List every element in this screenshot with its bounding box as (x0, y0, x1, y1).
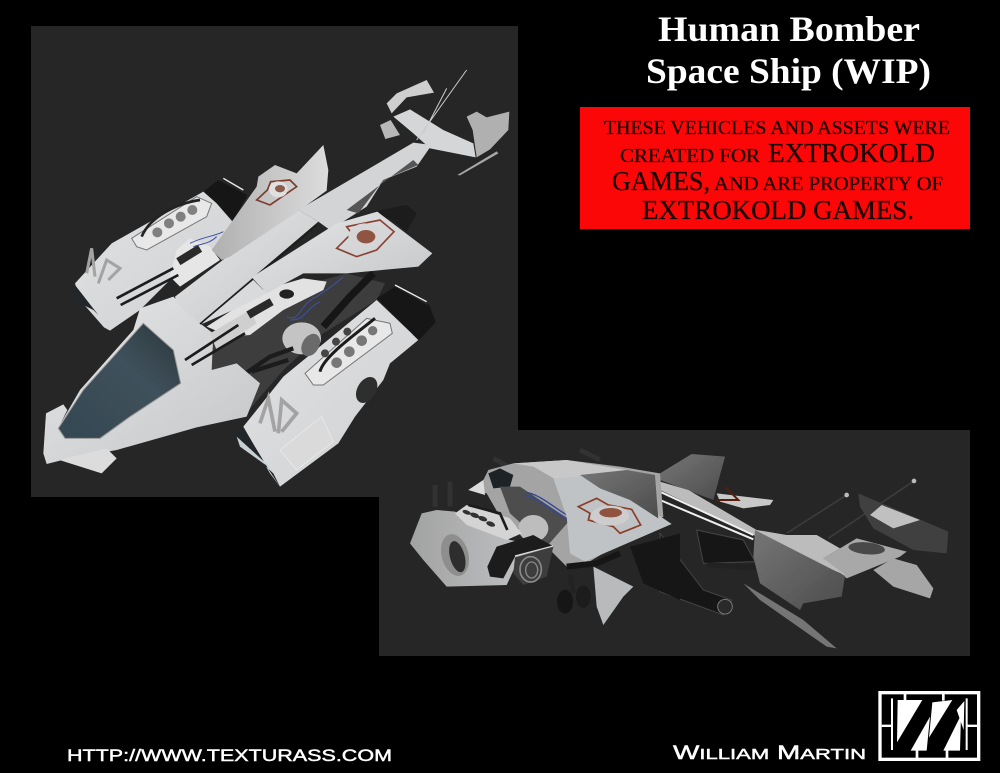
lower blade (743, 583, 837, 648)
far upright wing (660, 454, 725, 500)
author name: W ILLIAM M ARTIN (673, 743, 866, 764)
lower fin (593, 567, 633, 625)
nacelle near (660, 533, 732, 615)
antennae (787, 481, 914, 538)
emblem left wing (257, 180, 297, 205)
turbine and pipes (238, 322, 324, 378)
rear fuselage spine (298, 143, 432, 230)
engine cone tip (718, 599, 732, 614)
panel: side view render background (379, 430, 970, 656)
ship: top three-quarter view (43, 70, 509, 487)
title: Human Bomber (658, 9, 920, 49)
canopy glass (58, 323, 181, 438)
forward white hull strips and guns (117, 238, 327, 365)
nacelle front (630, 533, 680, 600)
nose fin (59, 448, 117, 473)
title (646, 9, 931, 91)
notice text (604, 117, 950, 225)
emblem (578, 498, 641, 533)
panel: top view render background (31, 26, 518, 497)
black pipe (567, 553, 620, 567)
spine shadow stripe (347, 160, 418, 213)
top hull plate (513, 460, 627, 480)
blue cables (190, 232, 343, 320)
left engine pod (73, 178, 247, 331)
right main wing (252, 212, 432, 293)
blue cables (524, 493, 570, 520)
tail assembly (380, 70, 509, 175)
website url: HTTP://WWW.TEXTURASS.COM (67, 746, 392, 765)
ship: side view, rear section (660, 454, 948, 648)
notice text: EXTROKOLD (768, 138, 935, 168)
central hull (175, 210, 318, 323)
gun barrels (435, 450, 600, 507)
top right fin (858, 493, 948, 553)
logo (880, 693, 979, 759)
turbine ring (518, 515, 548, 542)
connecting rod (707, 565, 755, 567)
hull back (468, 460, 663, 567)
spine (660, 482, 847, 576)
upper left wing (212, 145, 328, 260)
tail plank (823, 538, 907, 578)
title: Space Ship (WIP) (646, 51, 931, 91)
rear engine cluster (373, 205, 417, 232)
notice text: THESE VEHICLES AND ASSETS WERE (604, 117, 950, 139)
hull side (500, 487, 570, 547)
notice text: CREATED FOR (620, 145, 761, 167)
far wing plate (717, 487, 773, 508)
ship: side view, forward section (410, 450, 680, 625)
dark lower fuselage (203, 273, 385, 417)
lower fin (873, 558, 933, 598)
canopy (488, 468, 513, 488)
near wing (553, 472, 672, 562)
right engine pod (234, 285, 436, 487)
antenna tips (844, 479, 916, 497)
gear (557, 575, 591, 614)
cockpit hull (43, 297, 260, 464)
nacelle far (697, 530, 755, 563)
notice text: GAMES, (612, 166, 710, 196)
side panel (753, 530, 845, 610)
red notice box (580, 107, 970, 229)
nose fin (468, 480, 485, 495)
tail plank shadow (848, 541, 885, 556)
notice text: AND ARE PROPERTY OF (714, 173, 943, 195)
spine rails (660, 492, 753, 539)
notice text: EXTROKOLD GAMES. (642, 195, 914, 225)
emblem right wing (337, 220, 394, 257)
near wing upright (580, 470, 658, 518)
black intake duct (323, 273, 373, 327)
under hull plate (200, 278, 267, 323)
hull seam (200, 225, 317, 324)
engine pod (410, 505, 554, 587)
